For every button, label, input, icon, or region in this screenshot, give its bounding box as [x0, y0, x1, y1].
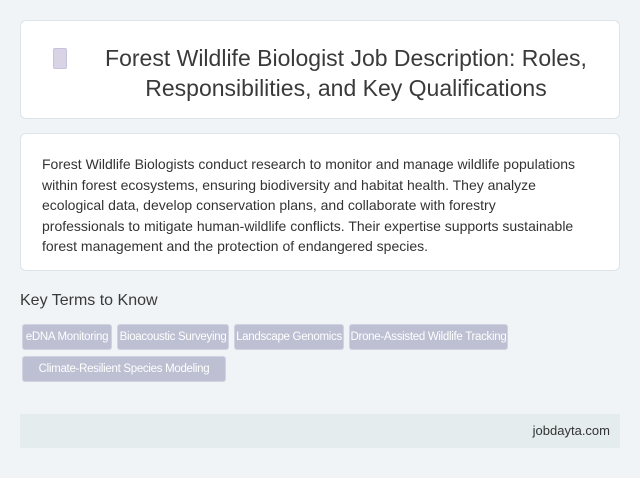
tag — [349, 324, 508, 350]
footer text: jobdayta.com — [533, 423, 610, 438]
tag: Bioacoustic Surveying — [120, 331, 226, 343]
description text: ecological data, develop conservation plans, and collaborate with forestry — [42, 197, 496, 213]
tag — [22, 324, 112, 350]
tag: eDNA Monitoring — [26, 331, 108, 343]
description card — [20, 133, 620, 271]
description text: professionals to mitigate human-wildlife conflicts. Their expertise supports sustainable — [42, 218, 573, 234]
header card — [20, 20, 620, 119]
tag — [117, 324, 229, 350]
tag: Landscape Genomics — [236, 331, 342, 343]
footer — [20, 414, 620, 448]
tag: Drone-Assisted Wildlife Tracking — [351, 331, 506, 343]
tag: Climate-Resilient Species Modeling — [39, 363, 209, 375]
description text: within forest ecosystems, ensuring biodiversity and habitat health. They analyze — [42, 176, 536, 192]
description text: forest management and the protection of endangered species. — [42, 238, 428, 254]
icon: document — [53, 48, 67, 69]
description text — [42, 156, 575, 254]
title: Forest Wildlife Biologist Job Description: Roles, Responsibilities, and Key Qualifications — [105, 45, 587, 101]
description text: Forest Wildlife Biologists conduct research to monitor and manage wildlife populations — [42, 156, 575, 172]
tag — [22, 356, 226, 382]
heading: key terms: Key Terms to Know — [20, 292, 158, 309]
tag — [234, 324, 344, 350]
